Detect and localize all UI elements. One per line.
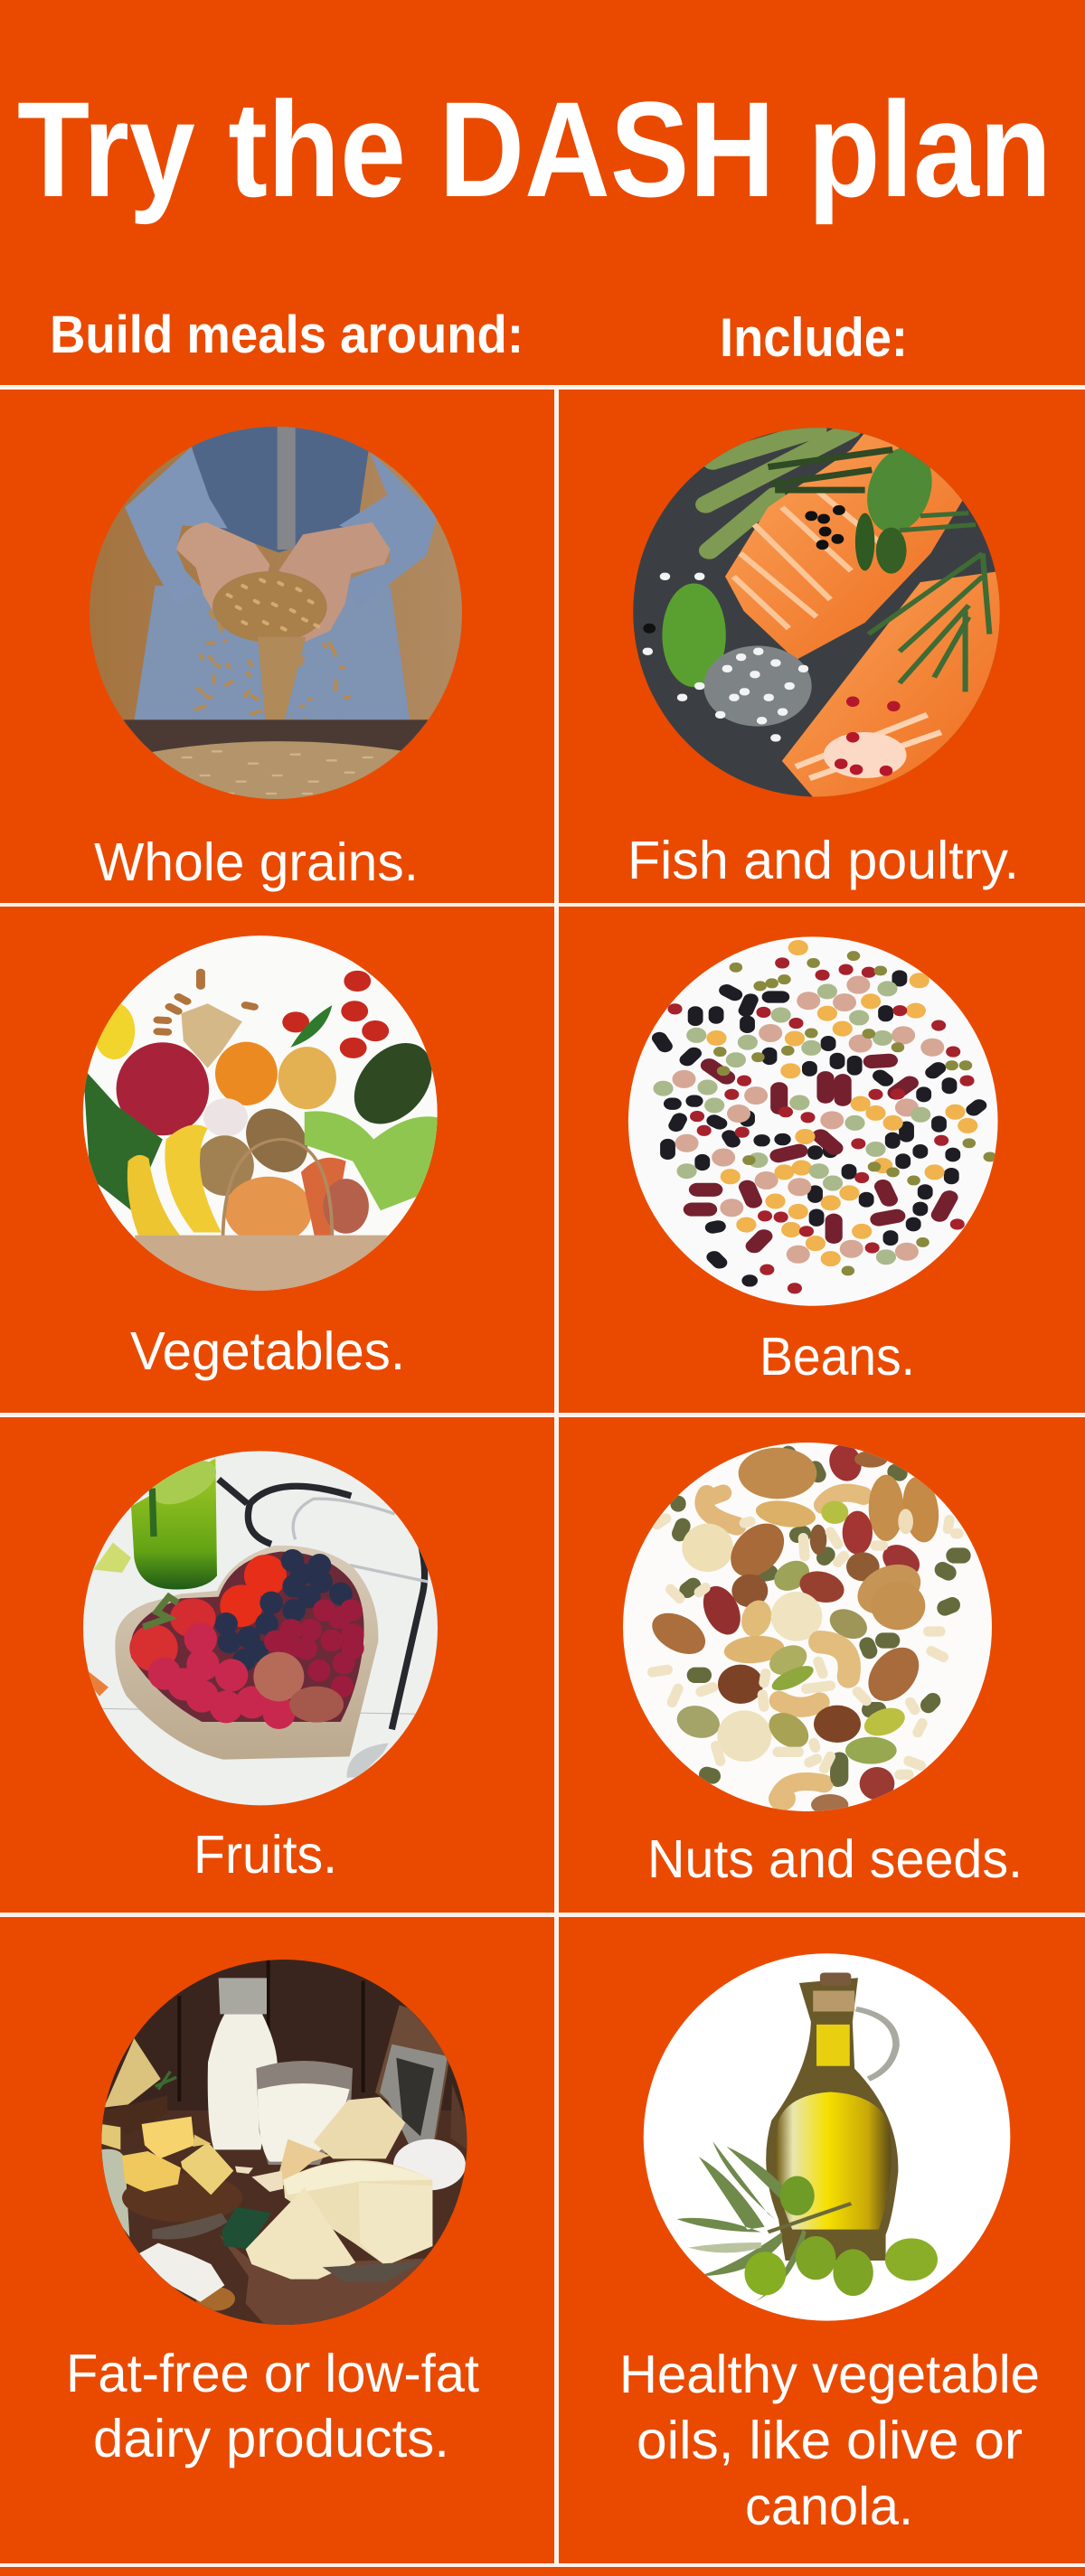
photo: olive oil bottle with olives: [640, 1950, 1014, 2323]
panel: whole grains: [86, 423, 466, 892]
column heading: include: Include:: [720, 307, 908, 368]
label: dairy products.: [93, 2409, 449, 2468]
column heading: build meals around: Build meals around:: [50, 306, 524, 364]
label: oils, like olive or: [637, 2411, 1023, 2470]
label: Healthy vegetable: [619, 2345, 1040, 2404]
panel: beans: [623, 931, 1004, 1387]
photo: milk and cheese on a wooden table: [95, 1957, 475, 2330]
label: Beans.: [760, 1327, 915, 1387]
panel: nuts and seeds: [619, 1440, 1023, 1889]
photo: hands pouring whole grains: [86, 423, 466, 805]
label: Vegetables.: [130, 1321, 405, 1381]
panel: fruits: [81, 1446, 443, 1885]
label: Fruits.: [193, 1825, 337, 1885]
label: [66, 2344, 479, 2468]
label: canola.: [745, 2477, 913, 2536]
photo: vegetables and produce in a paper bag: [80, 931, 448, 1295]
label: Fat-free or low-fat: [66, 2344, 479, 2403]
label: [619, 2345, 1040, 2536]
photo: mixed beans: [623, 931, 1004, 1312]
photo: mixed nuts and seeds: [619, 1440, 995, 1817]
label: Nuts and seeds.: [647, 1829, 1023, 1889]
panel: fish and poultry: [627, 427, 1019, 890]
panel: vegetable oils: [619, 1950, 1040, 2536]
panel: dairy: [66, 1957, 479, 2468]
label: Whole grains.: [94, 832, 419, 892]
panel: vegetables: [80, 931, 448, 1381]
label: Fish and poultry.: [627, 831, 1019, 890]
photo: salmon fillets with herbs: [629, 427, 1004, 802]
photo: heart-shaped bowl of fruit: [81, 1446, 443, 1808]
